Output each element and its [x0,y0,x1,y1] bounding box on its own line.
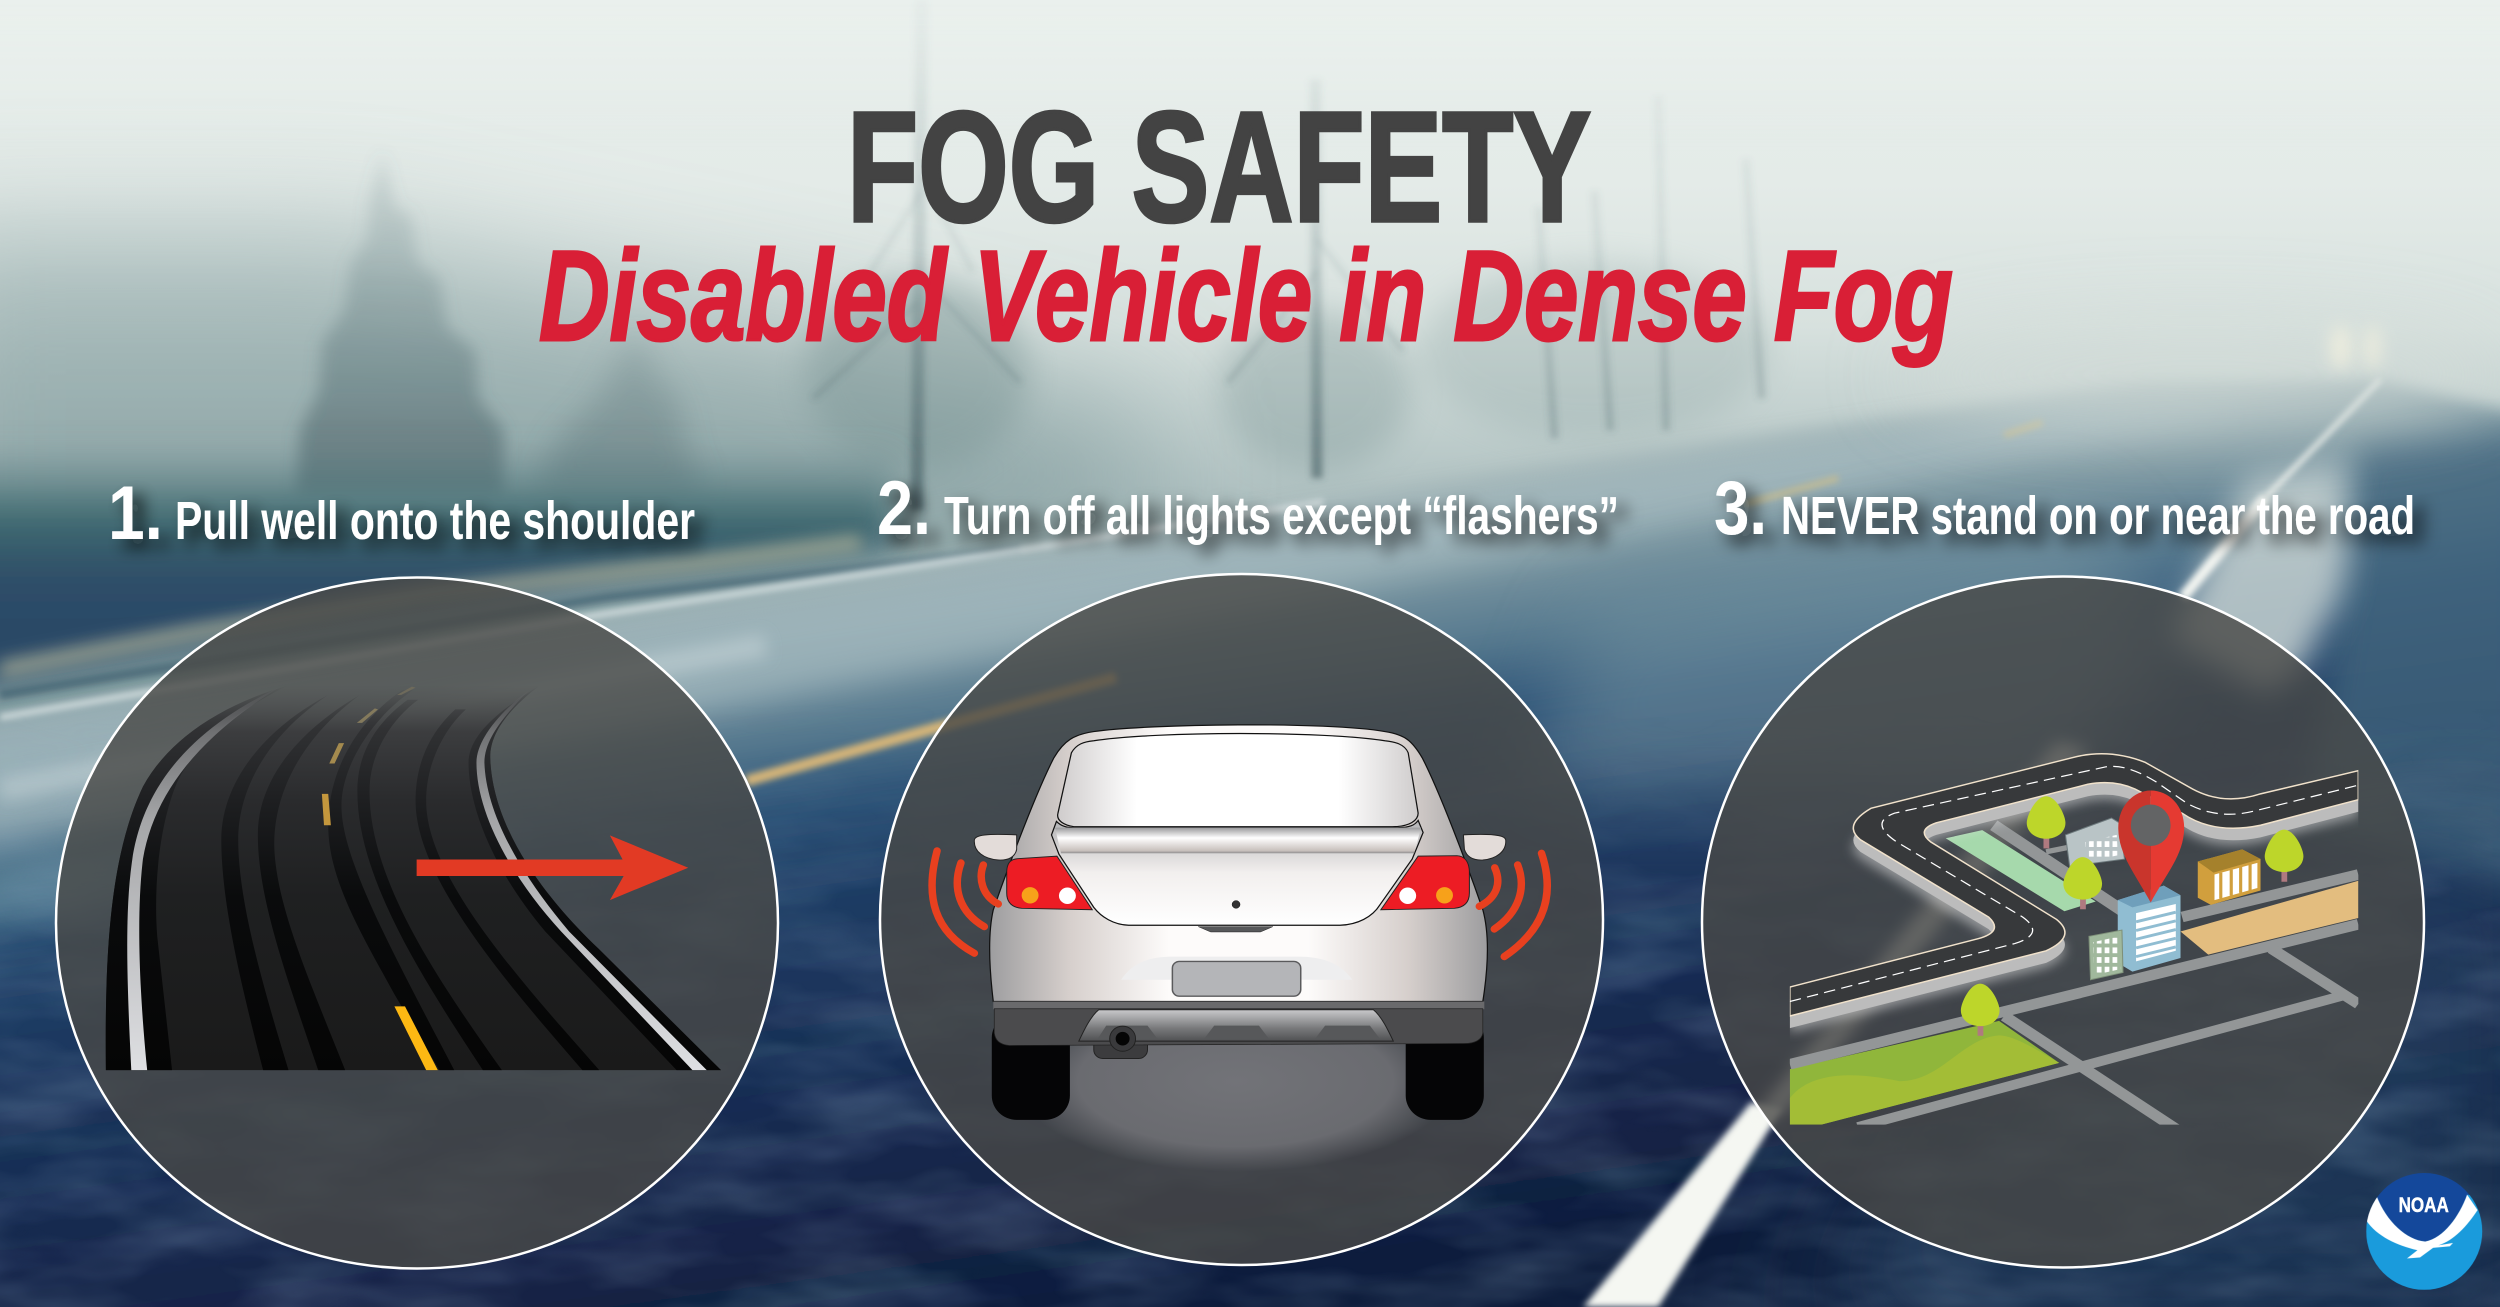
road ribbon [1790,754,2358,1033]
panel: never stand near road [1702,576,2424,1268]
buildings [2065,818,2261,980]
step 2 heading [877,466,1619,551]
icon: location pin [2118,790,2184,903]
subtitle: Disabled Vehicle in Dense Fog [539,225,1953,368]
step 1 heading [108,471,695,556]
illustration: curved road [106,685,721,1070]
step 2 heading: 2. [877,466,931,551]
panel: turn off lights, flashers on [880,574,1603,1265]
step 3 heading [1714,466,2415,551]
illustration: car rear [932,725,1547,1172]
icon: right flasher arcs [1479,853,1547,957]
title block [539,80,1953,368]
logo: NOAA [2366,1173,2482,1290]
step 1 heading: Pull well onto the shoulder [175,491,695,551]
panel: pull onto shoulder [56,578,778,1268]
trees [1961,796,2303,1036]
step 3 heading: 3. [1714,466,1767,551]
step 2 heading: Turn off all lights except “flashers” [944,486,1619,546]
icon: left flasher arcs [932,851,998,953]
illustration: city map [1790,754,2358,1129]
step 1 heading: 1. [108,471,163,556]
ground streets and lots [1790,825,2358,1129]
title: FOG SAFETY [847,80,1591,255]
arrow: move right [417,835,688,900]
logo: NOAA: NOAA [2399,1193,2449,1217]
